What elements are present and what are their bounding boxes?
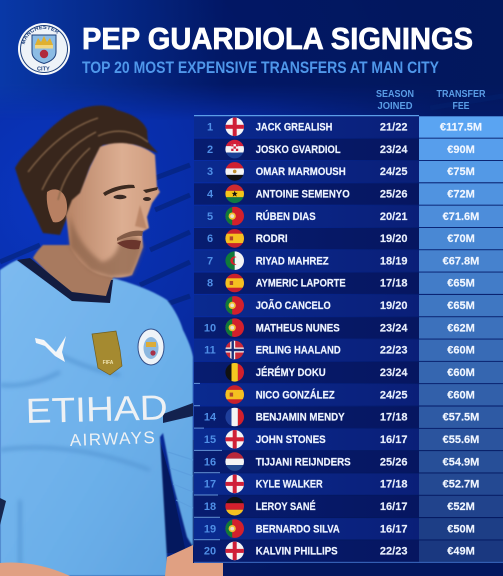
row 2: €90M bbox=[447, 144, 475, 156]
nose shadow bbox=[135, 205, 147, 229]
row 20: KALVIN PHILLIPS bbox=[256, 546, 338, 558]
row 2: 2 bbox=[207, 144, 213, 156]
row 5: 20/21 bbox=[380, 211, 407, 223]
row 6: 19/20 bbox=[380, 233, 407, 245]
row 17: 17/18 bbox=[380, 479, 407, 491]
row 4: ANTOINE SEMENYO bbox=[256, 188, 350, 200]
row 10: MATHEUS NUNES bbox=[256, 322, 340, 334]
collar bbox=[17, 258, 113, 303]
moustache bbox=[117, 231, 143, 241]
row 9: €65M bbox=[447, 300, 475, 312]
column header: transfer fee: FEE bbox=[452, 100, 470, 112]
row 6: RODRI bbox=[256, 233, 288, 245]
row 9: 19/20 bbox=[380, 300, 407, 312]
sleeve stripes bbox=[168, 452, 193, 508]
row 11: 11 bbox=[204, 345, 216, 357]
column header: season joined bbox=[376, 88, 414, 112]
transfer table bbox=[194, 116, 503, 562]
hands bbox=[0, 563, 70, 576]
row 10: 10 bbox=[204, 322, 216, 334]
row 8: 8 bbox=[207, 278, 213, 290]
row 17: KYLE WALKER bbox=[256, 479, 323, 491]
row 19: 16/17 bbox=[380, 523, 407, 535]
row 5: €71.6M bbox=[443, 211, 479, 223]
shirt shadows bbox=[0, 355, 150, 576]
row 20: €49M bbox=[447, 546, 475, 558]
club crest bbox=[18, 23, 70, 75]
row 7: €67.8M bbox=[443, 255, 479, 267]
sleeve gap shadow bbox=[159, 437, 186, 553]
row 18: LEROY SANÉ bbox=[256, 500, 316, 513]
player photo bbox=[0, 106, 223, 576]
ear bbox=[47, 189, 67, 222]
row 12: 23/24 bbox=[380, 367, 408, 379]
row 17: 17 bbox=[204, 479, 216, 491]
row 8: €65M bbox=[447, 278, 475, 290]
row 7: RIYAD MAHREZ bbox=[256, 255, 329, 267]
row 15: JOHN STONES bbox=[256, 434, 326, 446]
row 13 bbox=[194, 384, 503, 406]
back of head hair bbox=[15, 106, 158, 235]
neck bbox=[33, 245, 114, 298]
row 10: 23/24 bbox=[380, 322, 408, 334]
row 14: 17/18 bbox=[380, 412, 407, 424]
row 3: 24/25 bbox=[380, 166, 407, 178]
row 14: BENJAMIN MENDY bbox=[256, 412, 345, 424]
row 12: €60M bbox=[447, 367, 475, 379]
row 11: ERLING HAALAND bbox=[256, 345, 341, 357]
row 18: 18 bbox=[204, 501, 216, 513]
row 7: 7 bbox=[207, 255, 213, 267]
column header: season joined: SEASON bbox=[376, 88, 414, 100]
hair highlights bbox=[28, 118, 148, 200]
player photo: AIRWAYS bbox=[69, 428, 155, 450]
row 4: 4 bbox=[207, 188, 214, 200]
row 19: €50M bbox=[447, 523, 475, 535]
row 5 bbox=[194, 206, 503, 227]
row 15: 15 bbox=[204, 434, 216, 446]
row 9 bbox=[194, 295, 503, 316]
row 16: 25/26 bbox=[380, 456, 407, 468]
left flank shadow bbox=[0, 498, 6, 525]
row 12: JÉRÉMY DOKU bbox=[256, 366, 326, 379]
row 13: NICO GONZÁLEZ bbox=[256, 388, 335, 401]
row 17 bbox=[194, 473, 503, 495]
row 1: 1 bbox=[207, 122, 213, 134]
shirt bbox=[0, 260, 193, 576]
row 2: 23/24 bbox=[380, 144, 408, 156]
row 18 bbox=[194, 496, 503, 517]
row 16: 16 bbox=[204, 456, 216, 468]
gold FIFA badge: FIFA bbox=[103, 360, 114, 366]
club crest: CITY bbox=[37, 66, 50, 72]
row 20: 20 bbox=[204, 546, 216, 558]
row 11: 22/23 bbox=[380, 345, 407, 357]
title: PEP GUARDIOLA SIGNINGS bbox=[82, 22, 473, 56]
row 8: AYMERIC LAPORTE bbox=[256, 278, 346, 290]
row 16: €54.9M bbox=[443, 456, 479, 468]
row 5: RÚBEN DIAS bbox=[256, 210, 316, 223]
row 3: €75M bbox=[447, 166, 475, 178]
row 15: 16/17 bbox=[380, 434, 407, 446]
row 19: BERNARDO SILVA bbox=[256, 523, 340, 535]
eyebrows bbox=[103, 185, 135, 196]
subtitle: TOP 20 MOST EXPENSIVE TRANSFERS AT MAN CITY bbox=[82, 59, 439, 77]
row 19: 19 bbox=[204, 523, 216, 535]
row 14: €57.5M bbox=[443, 412, 479, 424]
row 8: 17/18 bbox=[380, 278, 407, 290]
row 1: 21/22 bbox=[380, 122, 407, 134]
row 20 bbox=[194, 540, 503, 562]
row 19 bbox=[194, 518, 503, 540]
row 5: 5 bbox=[207, 211, 213, 223]
row 13: 24/25 bbox=[380, 389, 407, 401]
row 2 bbox=[194, 139, 503, 160]
row 7: 18/19 bbox=[380, 255, 407, 267]
captain armband bbox=[163, 403, 193, 423]
table header rule bbox=[194, 115, 419, 116]
gold FIFA badge bbox=[92, 331, 122, 375]
row 3: OMAR MARMOUSH bbox=[256, 166, 346, 178]
column header: season joined: JOINED bbox=[378, 100, 413, 112]
row 4 bbox=[194, 183, 503, 205]
row 6 bbox=[194, 228, 503, 249]
row 3: 3 bbox=[207, 166, 213, 178]
row 1: JACK GREALISH bbox=[256, 122, 332, 134]
row 4: €72M bbox=[447, 188, 475, 200]
row 1 bbox=[194, 116, 503, 138]
row 15 bbox=[194, 429, 503, 450]
row 16 bbox=[194, 451, 503, 472]
row 18: 16/17 bbox=[380, 501, 407, 513]
row 6: €70M bbox=[447, 233, 475, 245]
row 12 bbox=[194, 362, 503, 383]
face bbox=[66, 143, 160, 278]
row 10 bbox=[194, 317, 503, 339]
row 18: €52M bbox=[447, 501, 475, 513]
row 14 bbox=[194, 406, 503, 428]
row 15: €55.6M bbox=[443, 434, 479, 446]
row 14: 14 bbox=[204, 412, 217, 424]
table bottom rule bbox=[194, 562, 503, 563]
eyes bbox=[114, 195, 126, 199]
row 13: €60M bbox=[447, 389, 475, 401]
sponsor text: ETIHAD bbox=[25, 388, 168, 431]
row 11: €60M bbox=[447, 345, 475, 357]
puma logo bbox=[35, 336, 66, 362]
column header: transfer fee: TRANSFER bbox=[436, 88, 486, 100]
row 4: 25/26 bbox=[380, 188, 407, 200]
row 20: 22/23 bbox=[380, 546, 407, 558]
mouth bbox=[117, 240, 141, 249]
row 17: €52.7M bbox=[443, 479, 479, 491]
column header: transfer fee bbox=[436, 88, 486, 112]
row 1: €117.5M bbox=[440, 122, 482, 134]
club crest: MANCHESTER bbox=[20, 25, 59, 44]
row 16: TIJJANI REIJNDERS bbox=[256, 456, 351, 468]
row 3 bbox=[194, 161, 503, 182]
row 2: JOSKO GVARDIOL bbox=[256, 144, 341, 156]
row 9: JOÃO CANCELO bbox=[256, 299, 331, 312]
row 10: €62M bbox=[447, 322, 475, 334]
row 7 bbox=[194, 250, 503, 272]
city badge on shirt bbox=[138, 329, 164, 365]
row 6: 6 bbox=[207, 233, 213, 245]
stubble bbox=[70, 215, 143, 277]
row 11 bbox=[194, 340, 503, 361]
row 8 bbox=[194, 272, 503, 294]
